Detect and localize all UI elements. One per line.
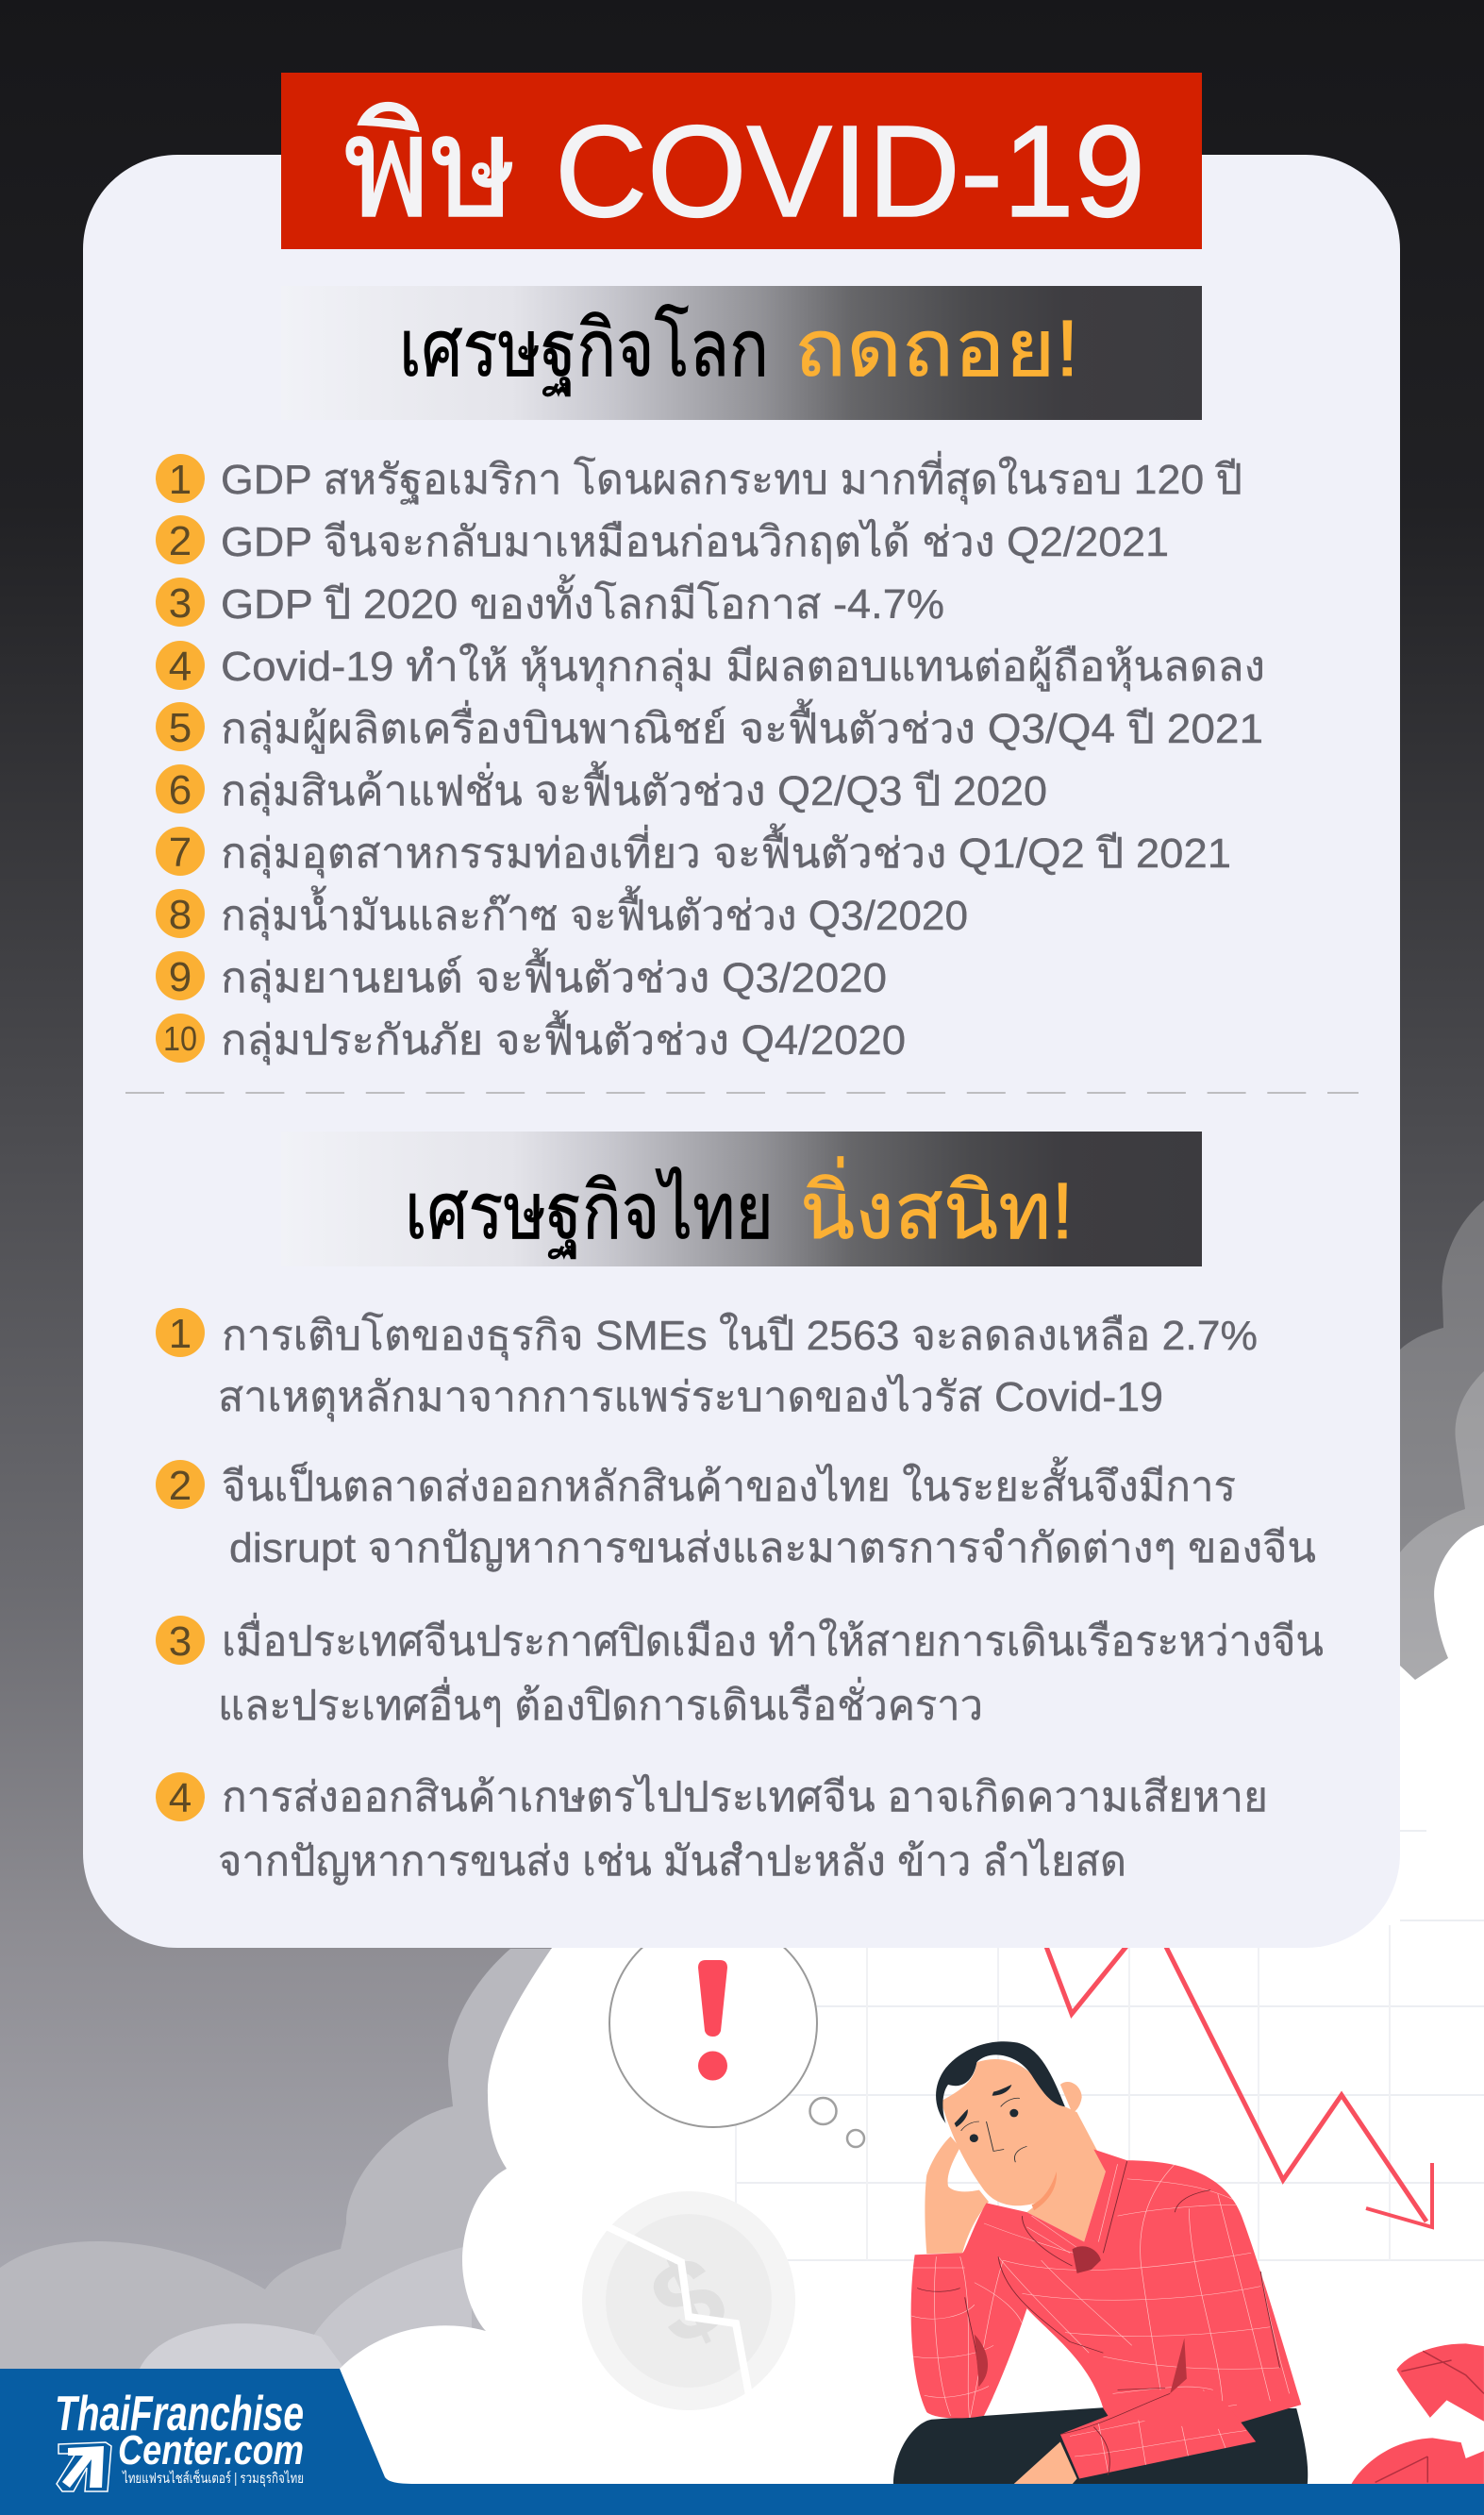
man: knee	[1013, 2441, 1077, 2484]
footer: blue band	[0, 2369, 1484, 2515]
title banner	[281, 73, 1202, 249]
cracked coin: $	[633, 2229, 743, 2371]
item 6: กลุ่มสินค้าแฟชั่น จะฟื้นตัวช่วง Q2/Q3 ปี 2020	[221, 761, 1047, 816]
man: ear	[1060, 2082, 1082, 2113]
logo: ThaiFranchise Center.com	[55, 2387, 304, 2491]
item 2: GDP จีนจะกลับมาเหมือนก่อนวิกฤตได้ ช่วง Q2/2021	[221, 518, 1169, 565]
man: eyes and expression	[955, 2085, 1018, 2142]
heading: world economy: ถดถอย!	[794, 304, 1079, 393]
item 2: 2	[169, 518, 192, 564]
item 6: 6	[169, 767, 192, 813]
item 1: GDP สหรัฐอเมริกา โดนผลกระทบ มากที่สุดในรอบ 120 ปี	[221, 450, 1242, 505]
man: shirt	[911, 2149, 1301, 2431]
point 3: และประเทศอื่นๆ ต้องปิดการเดินเรือชั่วคราว	[218, 1676, 983, 1729]
logo icon: arrow	[57, 2442, 111, 2491]
item 8: 8	[169, 892, 192, 938]
item 1: 1	[169, 457, 192, 503]
man: trousers	[893, 2407, 1308, 2484]
logo: ThaiFranchise Center.com: Center.com	[118, 2427, 304, 2473]
point 2: 2	[169, 1463, 192, 1509]
item 8: กลุ่มน้ำมันและก๊าซ จะฟื้นตัวช่วง Q3/2020	[221, 885, 968, 941]
logo: ThaiFranchise Center.com: ไทยแฟรนไชส์เซ็นเตอร์ | รวมธุรกิจไทย	[122, 2469, 304, 2488]
man: hand on head	[925, 2137, 989, 2254]
item 3: 3	[169, 580, 192, 627]
item 4: Covid-19 ทำให้ หุ้นทุกกลุ่ม มีผลตอบแทนต่อผู้ถือหุ้นลดลง	[221, 643, 1265, 692]
list: world economy	[156, 450, 1265, 1065]
man: face and neck	[941, 2059, 1106, 2242]
point 4: 4	[169, 1775, 192, 1821]
item 3: GDP ปี 2020 ของทั้งโลกมีโอกาส -4.7%	[221, 574, 944, 628]
point 2	[156, 1456, 1316, 1571]
item 7: กลุ่มอุตสาหกรรมท่องเที่ยว จะฟื้นตัวช่วง Q1/Q2 ปี 2021	[221, 823, 1231, 879]
logo: ThaiFranchise Center.com: ThaiFranchise	[55, 2387, 304, 2441]
chart board: grid lines	[736, 1831, 1484, 2260]
item 5: กลุ่มผู้ผลิตเครื่องบินพาณิชย์ จะฟื้นตัวช่วง Q3/Q4 ปี 2021	[221, 698, 1263, 754]
man: hair	[936, 2041, 1065, 2123]
heading: world economy	[281, 286, 1202, 420]
item 5: 5	[169, 705, 192, 751]
item 9: กลุ่มยานยนต์ จะฟื้นตัวช่วง Q3/2020	[221, 947, 887, 1003]
clouds: right grey layers	[1321, 1200, 1484, 1699]
man: shirt folds	[917, 2161, 1279, 2475]
panel: main card	[83, 73, 1400, 1948]
cracked coin	[582, 2191, 795, 2416]
point 3: 3	[169, 1618, 192, 1665]
item 9: 9	[169, 954, 192, 1000]
man: lower sleeve	[1060, 2388, 1256, 2479]
heading: Thai economy	[281, 1132, 1202, 1266]
illustration: worried man in red plaid shirt	[893, 2041, 1308, 2484]
man: plaid lines	[911, 2164, 1290, 2472]
point 1	[156, 1308, 1258, 1422]
heading: world economy: เศรษฐกิจโลก	[399, 304, 769, 396]
white cloud	[340, 1525, 1484, 2515]
item 10: 10	[163, 1019, 197, 1058]
point 2: จีนเป็นตลาดส่งออกหลักสินค้าของไทย ในระยะสั้นจึงมีการ	[222, 1456, 1236, 1510]
heading: Thai economy: นิ่งสนิท!	[800, 1156, 1074, 1255]
point 2: disrupt จากปัญหาการขนส่งและมาตรการจำกัดต่างๆ ของจีน	[229, 1525, 1316, 1571]
list: Thai economy	[156, 1308, 1324, 1885]
thought bubble with exclamation mark	[609, 1920, 864, 2147]
point 3: เมื่อประเทศจีนประกาศปิดเมือง ทำให้สายการเดินเรือระหว่างจีน	[222, 1612, 1324, 1665]
item 10: กลุ่มประกันภัย จะฟื้นตัวช่วง Q4/2020	[221, 1010, 906, 1065]
man: chin shadow	[1032, 2171, 1057, 2210]
point 1: สาเหตุหลักมาจากการแพร่ระบาดของไวรัส Covid-19	[218, 1373, 1163, 1422]
man: shadow under arm and collar knot	[975, 2335, 1187, 2393]
item 7: 7	[169, 830, 192, 876]
item 4: 4	[169, 644, 192, 690]
point 1: 1	[169, 1311, 192, 1357]
red leaves	[1351, 2343, 1484, 2484]
clouds: left grey layers	[0, 1949, 566, 2515]
point 3	[156, 1612, 1324, 1729]
title banner: พิษ	[343, 88, 517, 246]
heading: Thai economy: เศรษฐกิจไทย	[405, 1166, 774, 1259]
point 4: จากปัญหาการขนส่ง เช่น มันสำปะหลัง ข้าว ลำไยสด	[218, 1837, 1126, 1885]
point 4	[156, 1772, 1268, 1885]
point 1: การเติบโตของธุรกิจ SMEs ในปี 2563 จะลดลงเหลือ 2.7%	[222, 1312, 1258, 1361]
title banner: COVID-19	[555, 99, 1145, 244]
chart: falling red trend arrow	[1045, 1939, 1432, 2227]
point 4: การส่งออกสินค้าเกษตรไปประเทศจีน อาจเกิดความเสียหาย	[222, 1773, 1268, 1820]
